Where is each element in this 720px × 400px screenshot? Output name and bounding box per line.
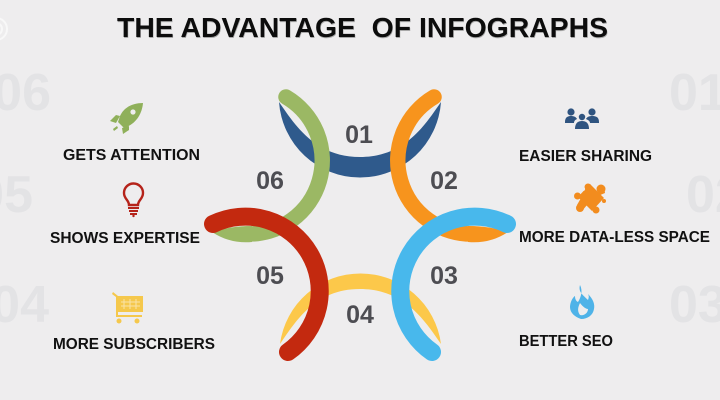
arc 04: yellow: [280, 273, 441, 344]
ring numbers: 05: [256, 262, 284, 290]
icon: light bulb: [124, 184, 143, 217]
title: THE ADVANTAGE OF INFOGRAPHS: [117, 12, 608, 43]
label: easier sharing: EASIER SHARING: [519, 148, 652, 165]
arc 06: green: [212, 97, 322, 242]
arc 03: light blue: [400, 217, 507, 352]
arc 01: navy: [279, 102, 441, 178]
icon: rocket: [110, 103, 143, 134]
label: more data-less space: MORE DATA-LESS SPACE: [519, 229, 710, 246]
icon: shopping cart: [112, 292, 143, 324]
ring numbers: 03: [430, 262, 458, 290]
ring numbers: [256, 121, 458, 329]
corner ring decoration: [0, 18, 7, 40]
ring numbers: 02: [430, 167, 458, 195]
label: shows expertise: SHOWS EXPERTISE: [50, 230, 200, 247]
ring numbers: 06: [256, 167, 284, 195]
label: gets attention: GETS ATTENTION: [63, 147, 200, 164]
faint background numbers: [0, 64, 720, 334]
ring numbers: 04: [346, 301, 374, 329]
icon: people group: [565, 108, 599, 129]
arc 05: red: [213, 217, 320, 352]
arc 02: orange: [398, 97, 508, 242]
label: more subscribers: MORE SUBSCRIBERS: [53, 336, 215, 353]
ring numbers: 01: [345, 121, 373, 149]
title: THE ADVANTAGE OF INFOGRAPHS: [118, 13, 608, 44]
icon: flame: [570, 285, 594, 319]
ring of six arcs: [212, 97, 508, 352]
label: better seo: BETTER SEO: [519, 333, 613, 350]
icon: puzzle piece: [574, 184, 606, 214]
